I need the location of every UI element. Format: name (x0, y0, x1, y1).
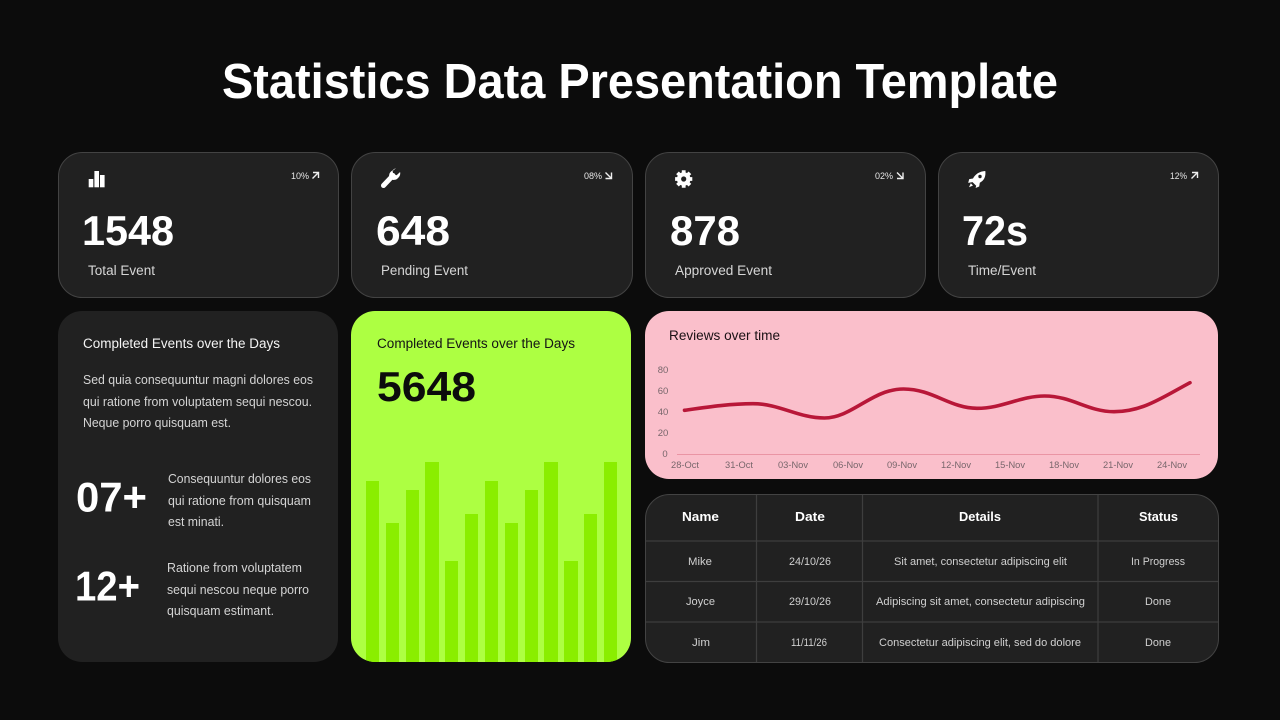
change: 02% down (875, 171, 903, 182)
panel: reviews line chart (645, 311, 1218, 479)
stat 12+ description: quisquam estimant. (167, 604, 274, 618)
line series (684, 383, 1190, 418)
row: Joyce (686, 596, 1171, 608)
panel: total event (58, 152, 338, 298)
row: Joyce: Joyce (686, 596, 715, 608)
change: 10% up: 10% (291, 171, 310, 182)
panel: approved event (646, 152, 926, 298)
table header: Date (795, 509, 825, 524)
panel: events table (646, 494, 1218, 662)
table header (682, 509, 1178, 524)
stat 12+ description (167, 561, 309, 618)
label: total event: Total Event (88, 263, 155, 278)
row: Mike: Mike (688, 556, 712, 568)
value: 648: 648 (376, 207, 450, 254)
panel heading: Reviews over time (669, 328, 780, 343)
title: Statistics Data Presentation Template (222, 55, 1058, 109)
value: 5648: 5648 (377, 363, 476, 410)
table header: Status (1139, 509, 1178, 524)
label: pending event: Pending Event (381, 263, 468, 278)
stat 07+ description: est minati. (168, 515, 224, 529)
icon: bar chart (89, 171, 105, 187)
value: 72s: 72s (962, 207, 1028, 254)
row: Mike: In Progress (1131, 556, 1185, 568)
x axis labels: 24-Nov (1157, 460, 1187, 471)
y axis labels: 0 (662, 449, 668, 460)
panel: time per event (938, 152, 1218, 298)
panel: green bar chart (351, 311, 631, 662)
row: Joyce: Adipiscing sit amet, consectetur adipiscing (876, 596, 1085, 608)
stat 12+ description: Ratione from voluptatem (167, 561, 302, 575)
paragraph (83, 373, 313, 430)
table grid (646, 495, 1218, 662)
stat 07+ description: Consequuntur dolores eos (168, 472, 311, 486)
change: 10% up (291, 171, 318, 182)
x axis labels: 15-Nov (995, 460, 1025, 471)
panel heading: Completed Events over the Days (377, 336, 575, 351)
x axis labels: 21-Nov (1103, 460, 1133, 471)
bar chart (366, 462, 617, 662)
row: Mike: Sit amet, consectetur adipiscing elit (894, 556, 1067, 568)
panel: pending event (352, 152, 632, 298)
change: 02% down: 02% (875, 171, 894, 182)
x axis labels: 12-Nov (941, 460, 971, 471)
value: 1548: 1548 (82, 207, 174, 254)
stat: 07+: 07+ (76, 474, 147, 520)
row: Jim: Jim (692, 637, 710, 649)
panel: completed events text (58, 311, 338, 662)
value: 878: 878 (670, 207, 740, 254)
change: 08% down (584, 171, 612, 182)
y axis labels: 60 (658, 386, 668, 397)
stat 07+ description: qui ratione from quisquam (168, 494, 311, 508)
row: Jim: Done (1145, 637, 1171, 649)
table header: Name (682, 509, 719, 524)
x axis labels: 28-Oct (671, 460, 699, 471)
x axis labels: 31-Oct (725, 460, 753, 471)
stat: 12+: 12+ (75, 562, 140, 610)
change: 12% up: 12% (1170, 171, 1187, 182)
row: Jim: 11/11/26 (791, 637, 827, 649)
stat 12+ description: sequi nescou neque porro (167, 583, 309, 597)
icon: wrench (384, 168, 400, 186)
icon: gear (675, 170, 692, 188)
label: time per event: Time/Event (968, 263, 1036, 278)
y axis labels: 20 (658, 428, 668, 439)
change: 12% up (1170, 171, 1198, 182)
x axis labels: 18-Nov (1049, 460, 1079, 471)
panel heading: Completed Events over the Days (83, 336, 280, 351)
row: Mike (688, 556, 1185, 568)
row: Joyce: 29/10/26 (789, 596, 831, 608)
y axis labels (658, 365, 668, 460)
paragraph: qui ratione from voluptatem sequi nescou. (83, 395, 312, 409)
label: approved event: Approved Event (675, 263, 772, 278)
row: Joyce: Done (1145, 596, 1171, 608)
table header: Details (959, 509, 1001, 524)
y axis labels: 40 (658, 407, 668, 418)
x axis line (677, 454, 1200, 456)
y axis labels: 80 (658, 365, 668, 376)
paragraph: Sed quia consequuntur magni dolores eos (83, 373, 313, 387)
x axis labels: 09-Nov (887, 460, 917, 471)
stat 07+ description (168, 472, 311, 529)
x axis labels (671, 460, 1187, 471)
x axis labels: 03-Nov (778, 460, 808, 471)
change: 08% down: 08% (584, 171, 603, 182)
row: Mike: 24/10/26 (789, 556, 831, 568)
row: Jim: Consectetur adipiscing elit, sed do dolore (879, 637, 1081, 649)
x axis labels: 06-Nov (833, 460, 863, 471)
icon: rocket (968, 171, 985, 188)
paragraph: Neque porro quisquam est. (83, 416, 231, 430)
row: Jim (692, 637, 1171, 649)
